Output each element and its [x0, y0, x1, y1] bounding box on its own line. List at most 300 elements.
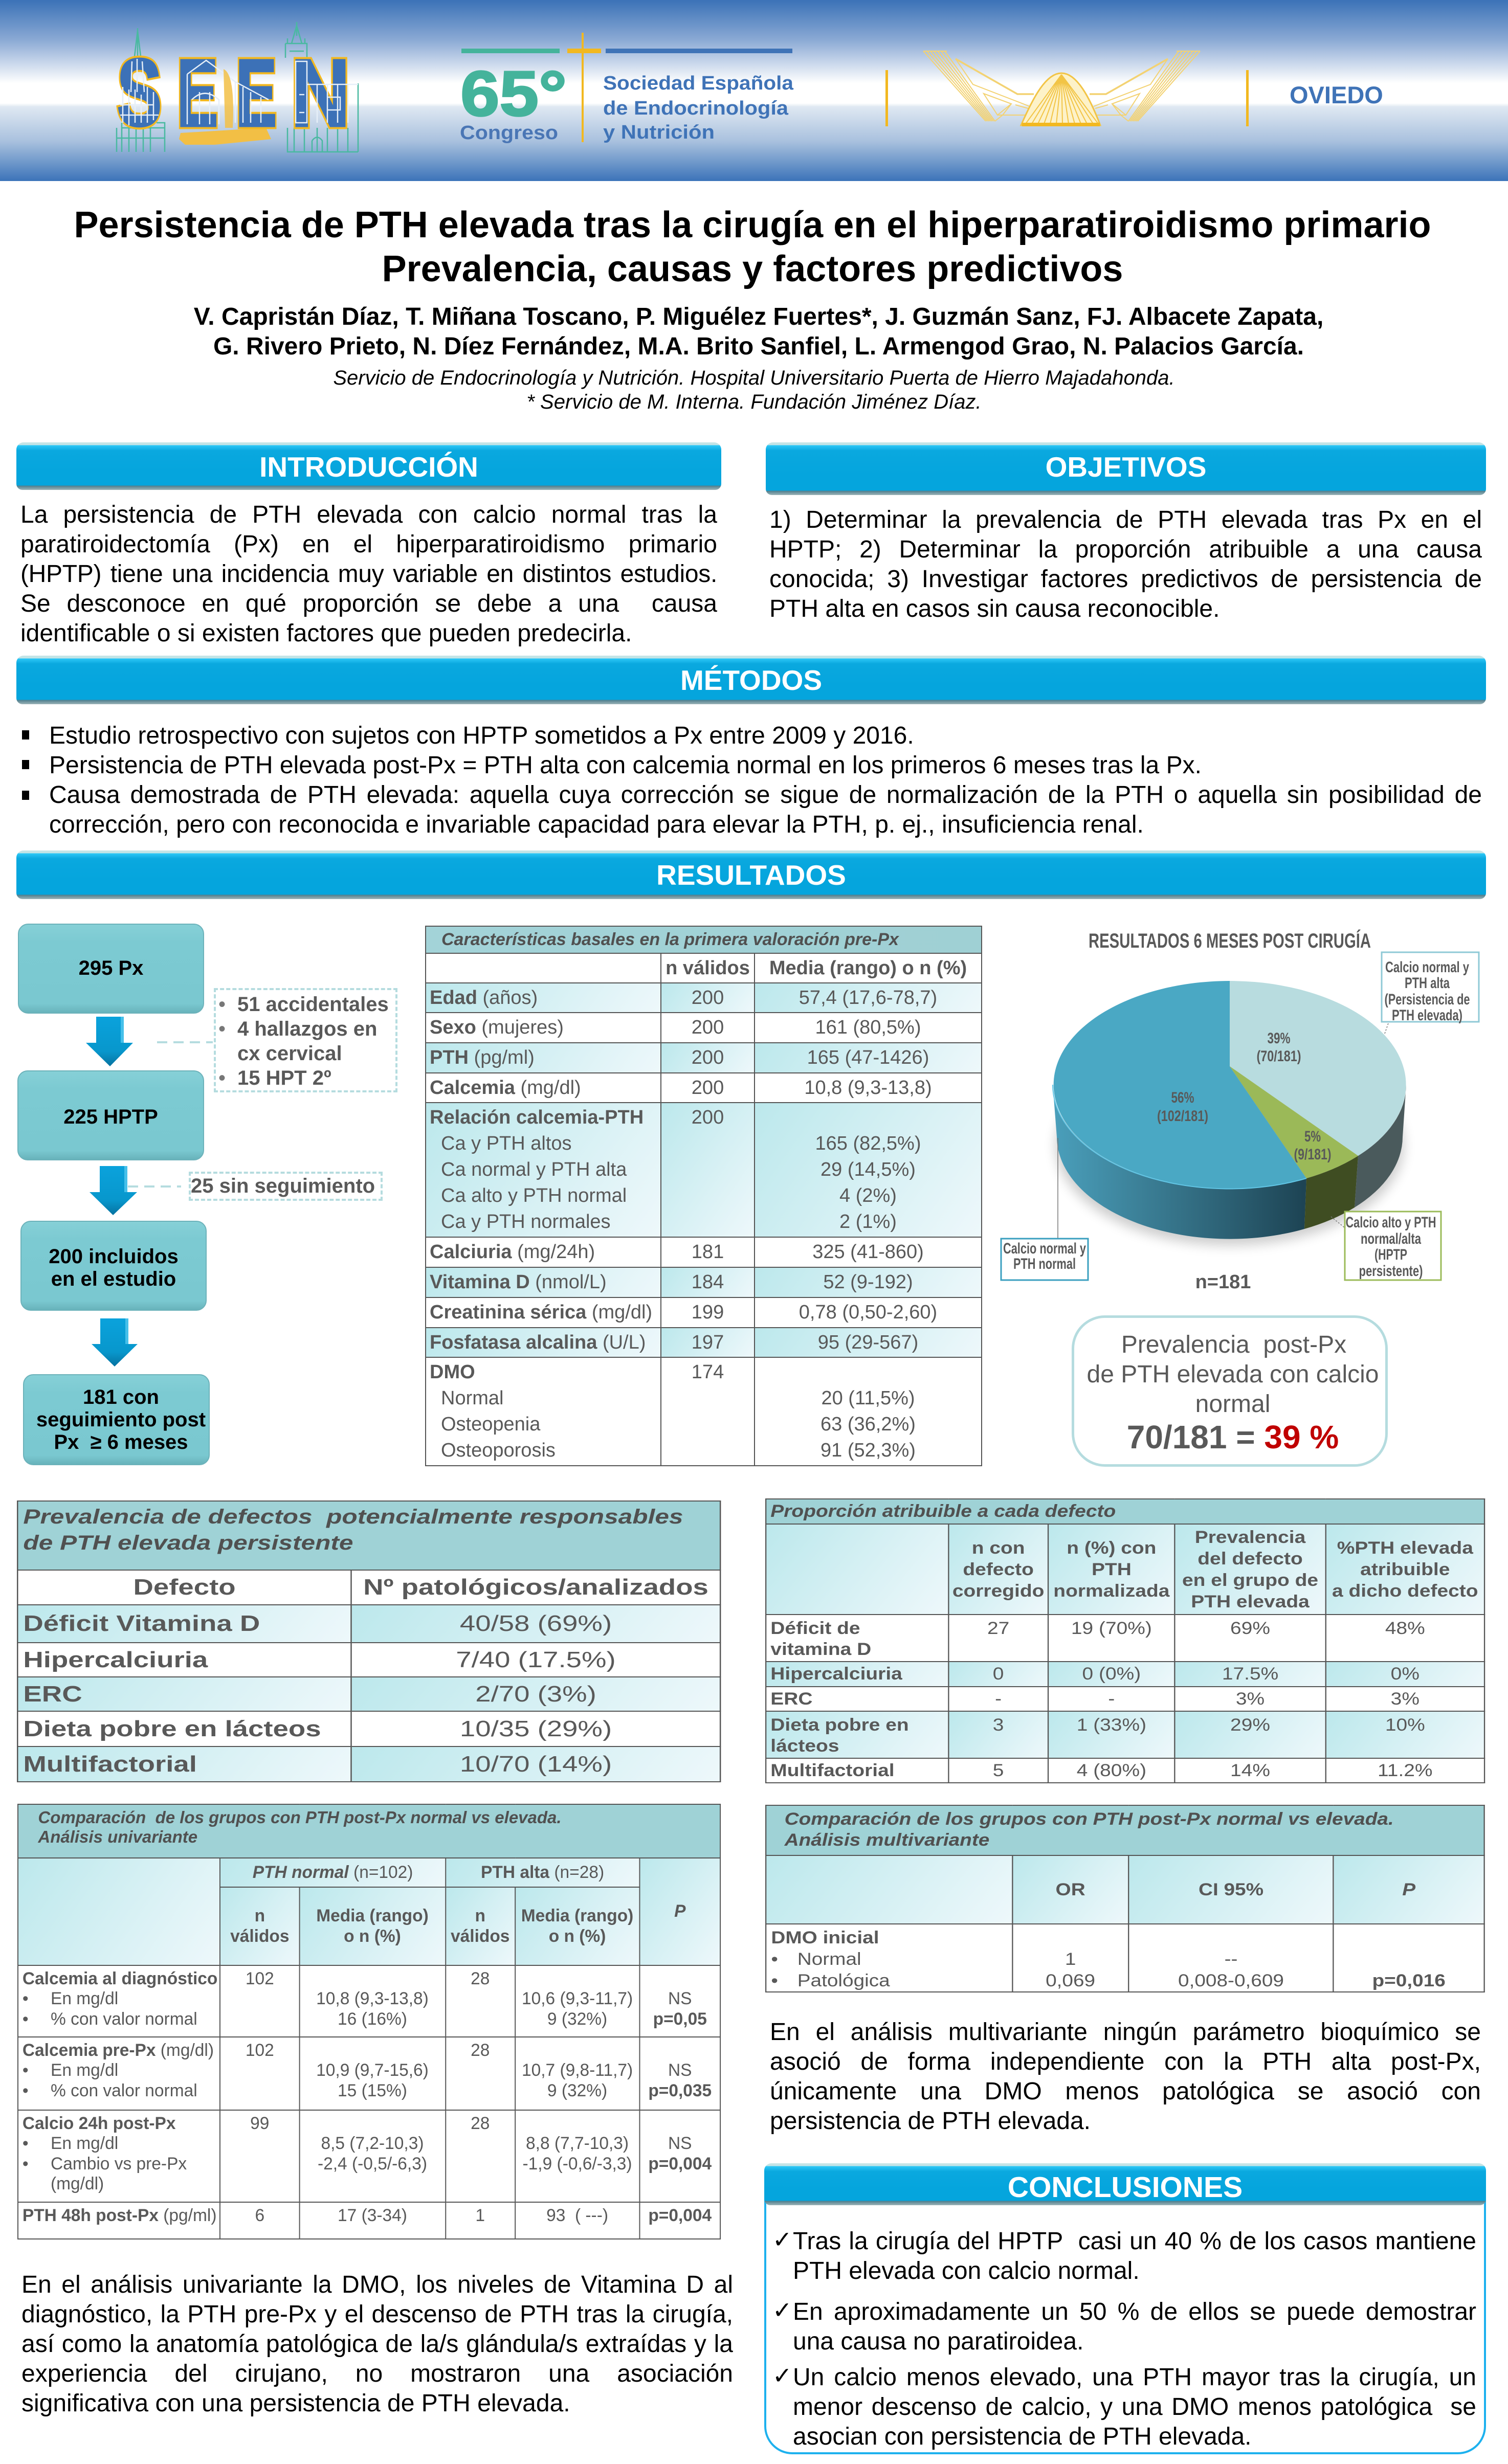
table: proporción atribuible: 0 (0%) [1082, 1664, 1141, 1684]
table: características basales: 200 [692, 1077, 724, 1099]
text: objetivos [769, 506, 1482, 622]
text: análisis multivariante [770, 2019, 1481, 2135]
table: características basales: 165 (82,5%) [815, 1133, 921, 1154]
table: análisis univariante: p=0,004 [648, 2206, 712, 2225]
table: proporción atribuible: 17.5% [1222, 1664, 1278, 1684]
conclusion 1 [774, 2227, 1476, 2286]
table: análisis multivariante: Normal [797, 1950, 861, 1969]
title [74, 205, 1431, 289]
table: prevalencia de defectos: Defecto [133, 1575, 236, 1600]
table: análisis multivariante: Comparación de los grupos con PTH post-Px normal vs elevada. [785, 1809, 1394, 1829]
table: análisis univariante: 28 [471, 2041, 490, 2060]
table: análisis univariante: NS [668, 2060, 692, 2080]
affiliations [333, 367, 1175, 413]
text: introducción [20, 501, 717, 647]
table: características basales: Calcemia (mg/dl) [430, 1077, 581, 1099]
table: proporción atribuible: 3% [1391, 1689, 1420, 1708]
table: prevalencia de defectos: Hipercalciuria [23, 1647, 208, 1672]
table: proporción atribuible: Prevalencia [1195, 1527, 1305, 1547]
text: introducción: La persistencia de PTH elevada con calcio normal tras la [20, 501, 717, 528]
table: características basales: 95 (29-567) [818, 1332, 918, 1353]
table: características basales: 57,4 (17,6-78,7) [799, 987, 937, 1009]
table: características basales: 10,8 (9,3-13,8) [804, 1077, 932, 1099]
table: prevalencia de defectos: 10/70 (14%) [460, 1751, 612, 1777]
table: características basales: 199 [692, 1302, 724, 1323]
table: análisis univariante: 93 ( ---) [546, 2206, 608, 2225]
table: características basales: Creatinina sérica (mg/dl) [430, 1302, 652, 1323]
text: introducción: (HPTP) tiene una incidencia muy variable en distintos estudios. [20, 561, 717, 588]
callout: calcio normal y PTH normal: PTH normal [1013, 1256, 1076, 1272]
table: proporción atribuible: Multifactorial [770, 1760, 895, 1780]
table: prevalencia de defectos: Dieta pobre en lácteos [23, 1716, 321, 1741]
callout: calcio alto [1345, 1212, 1441, 1280]
sample size: n=181 [1195, 1271, 1251, 1293]
text: objetivos: HPTP; 2) Determinar la proporción atribuible a una causa [769, 536, 1482, 563]
table: análisis univariante: 102 [246, 1969, 274, 1988]
table: análisis univariante: Media (rango) [521, 1906, 633, 1925]
table: análisis univariante: NS [668, 2134, 692, 2153]
text: análisis univariante: experiencia del cirujano, no mostraron una asociación [21, 2360, 733, 2387]
title: Persistencia de PTH elevada tras la cirugía en el hiperparatiroidismo primario [74, 205, 1431, 245]
table: análisis univariante: 10,6 (9,3-11,7) [522, 1989, 633, 2008]
table: proporción atribuible: 19 (70%) [1071, 1619, 1152, 1638]
heading: conclusiones: CONCLUSIONES [1008, 2171, 1243, 2204]
table: prevalencia de defectos [17, 1500, 721, 1782]
table: características basales: 91 (52,3%) [820, 1440, 916, 1461]
table: análisis univariante: 6 [255, 2206, 264, 2225]
conclusion 1: ✓ [772, 2226, 792, 2253]
affiliations: * Servicio de M. Interna. Fundación Jiménez Díaz. [526, 391, 982, 413]
table: análisis multivariante: p=0,016 [1372, 1971, 1446, 1990]
table: proporción atribuible: 14% [1230, 1760, 1270, 1780]
dashed connectors [128, 1042, 213, 1186]
table: proporción atribuible: - [995, 1689, 1002, 1708]
table: características basales: 29 (14,5%) [820, 1159, 916, 1180]
table: análisis univariante [17, 1804, 721, 2239]
table: proporción atribuible: n con [972, 1538, 1025, 1558]
arrow 1 [86, 1017, 133, 1066]
table: características basales [425, 926, 982, 1466]
table: prevalencia de defectos: de PTH elevada persistente [23, 1532, 353, 1554]
table: análisis multivariante: DMO inicial [771, 1928, 879, 1947]
table: proporción atribuible: en el grupo de [1182, 1570, 1318, 1589]
text: análisis multivariante: únicamente una DMO menos patológica se asoció con [770, 2078, 1481, 2105]
table: características basales: Media (rango) o n (%) [769, 957, 967, 979]
table: características basales: Relación calcemia-PTH [430, 1107, 644, 1128]
table: análisis univariante: 17 (3-34) [338, 2206, 407, 2225]
table: análisis univariante: 10,7 (9,8-11,7) [522, 2060, 633, 2080]
table: análisis multivariante: 1 [1065, 1950, 1076, 1969]
table: análisis univariante: p=0,035 [648, 2081, 712, 2100]
note: excluded: 15 HPT 2º [237, 1067, 331, 1089]
conclusion 2: una causa no paratiroidea. [793, 2328, 1083, 2355]
table: proporción atribuible: ERC [770, 1689, 813, 1708]
heading: métodos [16, 656, 1486, 704]
table: características basales: 165 (47-1426) [807, 1047, 929, 1068]
flowchart [17, 924, 397, 1465]
box: 295 Px: 295 Px [79, 957, 143, 979]
table: análisis univariante: Media (rango) [316, 1906, 429, 1925]
table: análisis multivariante: OR [1056, 1880, 1085, 1899]
text: análisis multivariante: persistencia de PTH elevada. [770, 2108, 1091, 2135]
table: análisis univariante: NS [668, 1989, 692, 2008]
table: características basales: 2 (1%) [839, 1211, 897, 1233]
heading: resultados [16, 850, 1486, 899]
logo: SEEN [117, 22, 358, 152]
callout: calcio alto: Calcio alto y PTH [1345, 1214, 1436, 1231]
table: proporción atribuible: 11.2% [1378, 1760, 1433, 1780]
table: características basales: PTH (pg/ml) [430, 1047, 535, 1068]
text: métodos [22, 722, 1482, 838]
note: excluded: 51 accidentales [237, 993, 389, 1016]
table: análisis univariante: PTH normal (n=102) [253, 1863, 413, 1882]
callout: calcio normal y PTH normal: Calcio normal y [1003, 1240, 1086, 1257]
table: proporción atribuible: 3% [1236, 1689, 1265, 1708]
conclusion 3: asocian con persistencia de PTH elevada. [793, 2423, 1252, 2450]
table: análisis multivariante [765, 1805, 1485, 1992]
table: características basales: Calciuria (mg/24h) [430, 1241, 595, 1263]
callout: calcio alto: (HPTP [1374, 1246, 1407, 1263]
slice label 56% [1157, 1089, 1208, 1125]
table: análisis univariante: n [475, 1906, 485, 1925]
conclusion 3: Un calcio menos elevado, una PTH mayor tras la cirugía, un [793, 2364, 1476, 2391]
table: características basales: Normal [441, 1387, 503, 1409]
table: características basales: Osteoporosis [441, 1440, 556, 1461]
table: proporción atribuible: defecto [963, 1560, 1034, 1579]
table: proporción atribuible: 4 (80%) [1077, 1760, 1146, 1780]
table: características basales: 200 [692, 1107, 724, 1128]
table: prevalencia de defectos: 10/35 (29%) [460, 1716, 612, 1741]
table: características basales: Sexo (mujeres) [430, 1017, 564, 1038]
conclusion 1: Tras la cirugía del HPTP casi un 40 % de los casos mantiene [793, 2228, 1476, 2255]
box: 181 con seguimiento: 181 con [83, 1386, 159, 1408]
table: análisis univariante: 9 (32%) [547, 2081, 607, 2100]
arrow 2 [90, 1166, 137, 1215]
table: características basales: 161 (80,5%) [815, 1017, 921, 1038]
callout: calcio normal y PTH normal [1001, 1239, 1088, 1280]
table: proporción atribuible: Proporción atribuible a cada defecto [770, 1502, 1116, 1521]
table: características basales: 197 [692, 1332, 724, 1353]
table: análisis univariante: En mg/dl [51, 1989, 118, 2008]
conclusion 3: ✓ [772, 2362, 792, 2389]
table: características basales: Osteopenia [441, 1414, 540, 1435]
table: análisis univariante: 9 (32%) [547, 2009, 607, 2029]
table: proporción atribuible: 48% [1385, 1619, 1425, 1638]
callout: prevalencia: 70/181 = 39 % [1127, 1419, 1339, 1455]
table: análisis univariante: En mg/dl [51, 2060, 118, 2080]
table: proporción atribuible: %PTH elevada [1337, 1538, 1473, 1558]
table: análisis multivariante: P [1402, 1880, 1415, 1899]
authors: V. Capristán Díaz, T. Miñana Toscano, P. Miguélez Fuertes*, J. Guzmán Sanz, FJ. Albacete Zapata, [194, 303, 1323, 330]
table: análisis multivariante: 0,008-0,609 [1178, 1971, 1284, 1990]
slice label 39% [1256, 1030, 1301, 1065]
table: prevalencia de defectos: 2/70 (3%) [475, 1682, 596, 1706]
table: características basales: 52 (9-192) [823, 1271, 913, 1293]
table: proporción atribuible [765, 1498, 1485, 1783]
box: 200 incluidos: 200 incluidos [49, 1245, 179, 1268]
table: análisis univariante: P [674, 1901, 685, 1921]
table: análisis univariante: Comparación de los grupos con PTH post-Px normal vs elevada. [38, 1808, 562, 1827]
table: proporción atribuible: PTH [1092, 1560, 1132, 1579]
text: objetivos: 1) Determinar la prevalencia de PTH elevada tras Px en el [769, 506, 1482, 533]
heading: resultados: RESULTADOS [656, 859, 846, 891]
table: análisis univariante: 99 [250, 2114, 269, 2133]
table: proporción atribuible: del defecto [1197, 1549, 1303, 1568]
table: prevalencia de defectos: 7/40 (17.5%) [456, 1647, 616, 1672]
frame [764, 2189, 1486, 2454]
table: análisis univariante: n [255, 1906, 265, 1925]
pie chart: resultados 6 meses [1001, 929, 1479, 1293]
box: 181 con seguimiento: seguimiento post [36, 1408, 206, 1431]
table: prevalencia de defectos: 40/58 (69%) [460, 1611, 612, 1636]
table: características basales: 63 (36,2%) [820, 1414, 916, 1435]
callout: calcio alto: normal/alta [1361, 1230, 1421, 1247]
table: características basales: 200 [692, 1047, 724, 1068]
table: características basales: Ca alto y PTH normal [441, 1185, 627, 1206]
chart title: RESULTADOS 6 MESES POST CIRUGÍA [1089, 929, 1371, 952]
slice label 39%: 39% [1268, 1030, 1290, 1047]
logo: SEEN: N [291, 40, 350, 146]
table: características basales: 200 [692, 1017, 724, 1038]
text: análisis multivariante: asoció de forma independiente con la PTH alta post-Px, [770, 2048, 1481, 2075]
text: análisis univariante: diagnóstico, la PTH pre-Px y el descenso de PTH tras la cirugía, [21, 2301, 733, 2328]
note: excluded: • [218, 993, 226, 1016]
box: 181 con seguimiento: Px ≥ 6 meses [54, 1431, 188, 1453]
text: objetivos: PTH alta en casos sin causa reconocible. [769, 595, 1219, 622]
table: características basales: Edad (años) [430, 987, 538, 1009]
heading: objetivos [766, 442, 1486, 495]
title: Prevalencia, causas y factores predictivos [382, 249, 1123, 289]
table: características basales: Fosfatasa alcalina (U/L) [430, 1332, 646, 1353]
panel: conclusiones [764, 2163, 1486, 2454]
table: características basales: Ca y PTH altos [441, 1133, 572, 1154]
conclusion 3 [774, 2363, 1476, 2452]
box: 295 Px [18, 924, 204, 1014]
table: proporción atribuible: 0% [1391, 1664, 1420, 1684]
heading: introducción [16, 442, 721, 490]
logo: SEEN: S [117, 40, 162, 146]
conclusion 1: PTH elevada con calcio normal. [793, 2257, 1140, 2284]
table: análisis multivariante: 0,069 [1046, 1971, 1095, 1990]
table: características basales: Ca y PTH normales [441, 1211, 611, 1233]
pie [1053, 981, 1406, 1245]
table: características basales: DMO [430, 1361, 475, 1383]
conclusion 3: menor descenso de calcio, y una DMO menos patológica se [793, 2393, 1476, 2421]
table: características basales: 4 (2%) [839, 1185, 897, 1206]
callout: calcio normal y PTH alta: PTH elevada) [1392, 1007, 1462, 1024]
text: análisis univariante: significativa con una persistencia de PTH elevada. [21, 2390, 570, 2417]
authors [194, 303, 1323, 360]
table: análisis univariante: o n (%) [549, 1926, 606, 1945]
callout: prevalencia [1072, 1315, 1388, 1467]
callout: calcio normal y PTH alta: PTH alta [1405, 975, 1450, 992]
logo: SEEN: N [291, 40, 350, 146]
conclusion list [772, 2226, 1476, 2450]
slice label 5% [1294, 1128, 1331, 1163]
table: proporción atribuible: 10% [1385, 1715, 1425, 1735]
text: métodos: Causa demostrada de PTH elevada: aquella cuya corrección se sigue de normalización de la PTH o aquella sin posibilidad de [49, 781, 1482, 809]
table: análisis univariante: válidos [230, 1926, 290, 1945]
logo: 65 Congreso: Sociedad Española [603, 73, 794, 94]
text: análisis univariante: En el análisis univariante la DMO, los niveles de Vitamina D al [21, 2271, 733, 2298]
table: análisis multivariante: -- [1225, 1950, 1237, 1969]
table: análisis univariante: 28 [471, 1969, 490, 1988]
table: proporción atribuible: 69% [1230, 1619, 1270, 1638]
affiliations: Servicio de Endocrinología y Nutrición. Hospital Universitario Puerta de Hierro Majadahonda. [333, 367, 1175, 389]
slice label 5%: (9/181) [1294, 1146, 1331, 1163]
heading: introducción: INTRODUCCIÓN [259, 451, 478, 483]
logo: SEEN: E [236, 40, 277, 146]
heading: métodos: MÉTODOS [680, 664, 822, 696]
header banner [0, 0, 1508, 181]
table: análisis univariante: Calcemia pre-Px (mg/dl) [23, 2041, 214, 2060]
table: proporción atribuible: normalizada [1053, 1581, 1169, 1601]
table: análisis univariante: En mg/dl [51, 2134, 118, 2153]
table: análisis univariante: (mg/dl) [51, 2174, 104, 2193]
conclusion 2: En aproximadamente un 50 % de ellos se puede demostrar [793, 2298, 1476, 2325]
heading: conclusiones [764, 2163, 1486, 2205]
table: proporción atribuible: Hipercalciuria [770, 1664, 902, 1684]
callout: prevalencia: Prevalencia post-Px [1121, 1331, 1346, 1358]
logo: 65 Congreso: de Endocrinología [603, 98, 789, 119]
table: análisis univariante: % con valor normal [51, 2081, 197, 2100]
table: análisis univariante: -2,4 (-0,5/-6,3) [318, 2154, 427, 2174]
table: proporción atribuible: - [1108, 1689, 1115, 1708]
logo: Oviedo fan [885, 51, 1249, 126]
logo: SEEN: E [177, 40, 218, 146]
logo: OVIEDO: OVIEDO [1290, 81, 1383, 108]
box: 200 incluidos: en el estudio [51, 1268, 176, 1290]
text: introducción: Se desconoce en qué proporción se debe a una causa [20, 590, 717, 617]
table: proporción atribuible: n (%) con [1067, 1538, 1156, 1558]
text: análisis multivariante: En el análisis multivariante ningún parámetro bioquímico se [770, 2019, 1481, 2046]
table: análisis univariante: PTH 48h post-Px (pg/ml) [23, 2206, 216, 2225]
callout: prevalencia: normal [1195, 1391, 1270, 1418]
table: prevalencia de defectos: Nº patológicos/analizados [363, 1575, 708, 1600]
slice label 39%: (70/181) [1256, 1048, 1301, 1065]
table: características basales: n válidos [666, 957, 750, 979]
callout: prevalencia: de PTH elevada con calcio [1086, 1361, 1379, 1388]
table: proporción atribuible: 0 [993, 1664, 1004, 1684]
callout: calcio normal y PTH alta [1382, 952, 1479, 1024]
slice label 56%: (102/181) [1157, 1108, 1208, 1125]
flow arrows [86, 1017, 213, 1367]
table: características basales: 181 [692, 1241, 724, 1263]
table: análisis univariante: 1 [475, 2206, 485, 2225]
text: métodos: Estudio retrospectivo con sujetos con HPTP sometidos a Px entre 2009 y 2016. [49, 722, 914, 749]
table: análisis univariante: -1,9 (-0,6/-3,3) [523, 2154, 632, 2174]
table: análisis univariante: Cambio vs pre-Px [51, 2154, 187, 2174]
table: proporción atribuible: vitamina D [770, 1640, 871, 1659]
authors: G. Rivero Prieto, N. Díez Fernández, M.A. Brito Sanfiel, L. Armengod Grao, N. Palacios García. [213, 333, 1304, 360]
note: lost to follow-up: 25 sin seguimiento [191, 1175, 375, 1197]
logo: 65 Congreso: Congreso [460, 122, 558, 144]
table: análisis univariante: Calcio 24h post-Px [23, 2114, 175, 2133]
table: características basales: Características basales en la primera valoración pre-Px [441, 930, 899, 949]
table: análisis univariante: 28 [471, 2114, 490, 2133]
text: métodos: corrección, pero con reconocida e invariable capacidad para elevar la PTH, p. ej., insuficiencia renal. [49, 811, 1144, 838]
table: características basales: Ca normal y PTH alta [441, 1159, 627, 1180]
table: análisis univariante: Análisis univariante [38, 1828, 197, 1847]
table: análisis univariante: 8,5 (7,2-10,3) [321, 2134, 424, 2153]
table: proporción atribuible: Dieta pobre en [770, 1715, 909, 1735]
conclusion 2 [774, 2297, 1476, 2363]
table: análisis univariante: Calcemia al diagnóstico [23, 1969, 217, 1988]
text: objetivos: conocida; 3) Investigar factores predictivos de persistencia de [769, 566, 1482, 593]
table: proporción atribuible: 1 (33%) [1077, 1715, 1146, 1735]
table: análisis univariante: 10,9 (9,7-15,6) [316, 2060, 429, 2080]
note: excluded: • [218, 1018, 226, 1040]
box: 225 HPTP: 225 HPTP [63, 1106, 158, 1128]
logo: SEEN: E [236, 40, 277, 146]
text: introducción: identificable o si existen factores que pueden predecirla. [20, 620, 632, 647]
table: proporción atribuible: 3 [993, 1715, 1004, 1735]
arrow 3 [92, 1318, 138, 1367]
table: análisis univariante: válidos [451, 1926, 509, 1945]
heading: objetivos: OBJETIVOS [1046, 451, 1206, 483]
table: proporción atribuible: lácteos [770, 1736, 839, 1756]
slice label 56%: 56% [1171, 1089, 1194, 1106]
callout: calcio normal y PTH alta: Calcio normal y [1385, 959, 1469, 976]
logo: SEEN: S [117, 40, 162, 146]
leaders [1058, 1022, 1389, 1238]
logo: 65 Congreso: 65° [460, 58, 567, 129]
note: excluded: cx cervical [237, 1042, 342, 1065]
table: características basales: 184 [692, 1271, 724, 1293]
table: prevalencia de defectos: Multifactorial [23, 1751, 197, 1777]
table: proporción atribuible: Déficit de [770, 1619, 860, 1638]
table: proporción atribuible: corregido [952, 1581, 1044, 1601]
text: introducción: paratiroidectomía (Px) en el hiperparatiroidismo primario [20, 531, 717, 558]
box: 181 con seguimiento [23, 1374, 210, 1465]
table: análisis multivariante: Patológica [797, 1971, 890, 1990]
logo: 65 Congreso: y Nutrición [603, 122, 715, 143]
table: análisis univariante: 15 (15%) [338, 2081, 407, 2100]
table: proporción atribuible: PTH elevada [1191, 1592, 1310, 1611]
table: análisis univariante: 8,8 (7,7-10,3) [526, 2134, 629, 2153]
box: 200 incluidos [20, 1221, 207, 1311]
text: análisis univariante [21, 2271, 733, 2417]
table: análisis univariante: p=0,05 [653, 2009, 707, 2029]
table: análisis univariante: 102 [246, 2041, 274, 2060]
table: características basales: 174 [692, 1361, 724, 1383]
note: excluded: 4 hallazgos en [237, 1018, 377, 1040]
table: proporción atribuible: 29% [1230, 1715, 1270, 1735]
table: prevalencia de defectos: ERC [23, 1682, 82, 1706]
note: excluded: • [218, 1067, 226, 1089]
table: características basales: 325 (41-860) [812, 1241, 924, 1263]
slice label 5%: 5% [1304, 1128, 1321, 1145]
table: análisis univariante: p=0,004 [648, 2154, 712, 2174]
table: prevalencia de defectos: Déficit Vitamina D [23, 1611, 260, 1636]
table: proporción atribuible: atribuible [1360, 1560, 1450, 1579]
table: análisis univariante: 16 (16%) [338, 2009, 407, 2029]
callout: calcio normal y PTH alta: (Persistencia de [1384, 991, 1470, 1008]
table: análisis univariante: o n (%) [344, 1926, 401, 1945]
table: características basales: 20 (11,5%) [821, 1387, 915, 1409]
table: proporción atribuible: 27 [987, 1619, 1009, 1638]
logo: 65 Congreso [460, 33, 794, 144]
logo: SEEN: E [177, 40, 218, 146]
text: análisis univariante: así como la anatomía patológica de la/s glándula/s extraídas y la [21, 2331, 733, 2358]
conclusion 2: ✓ [772, 2296, 792, 2324]
note: excluded [214, 988, 397, 1092]
table: análisis univariante: PTH alta (n=28) [481, 1863, 604, 1882]
table: prevalencia de defectos: Prevalencia de defectos potencialmente responsables [23, 1506, 683, 1528]
table: análisis multivariante: Análisis multivariante [785, 1830, 989, 1850]
table: características basales: 200 [692, 987, 724, 1009]
box: 225 HPTP [17, 1070, 204, 1160]
